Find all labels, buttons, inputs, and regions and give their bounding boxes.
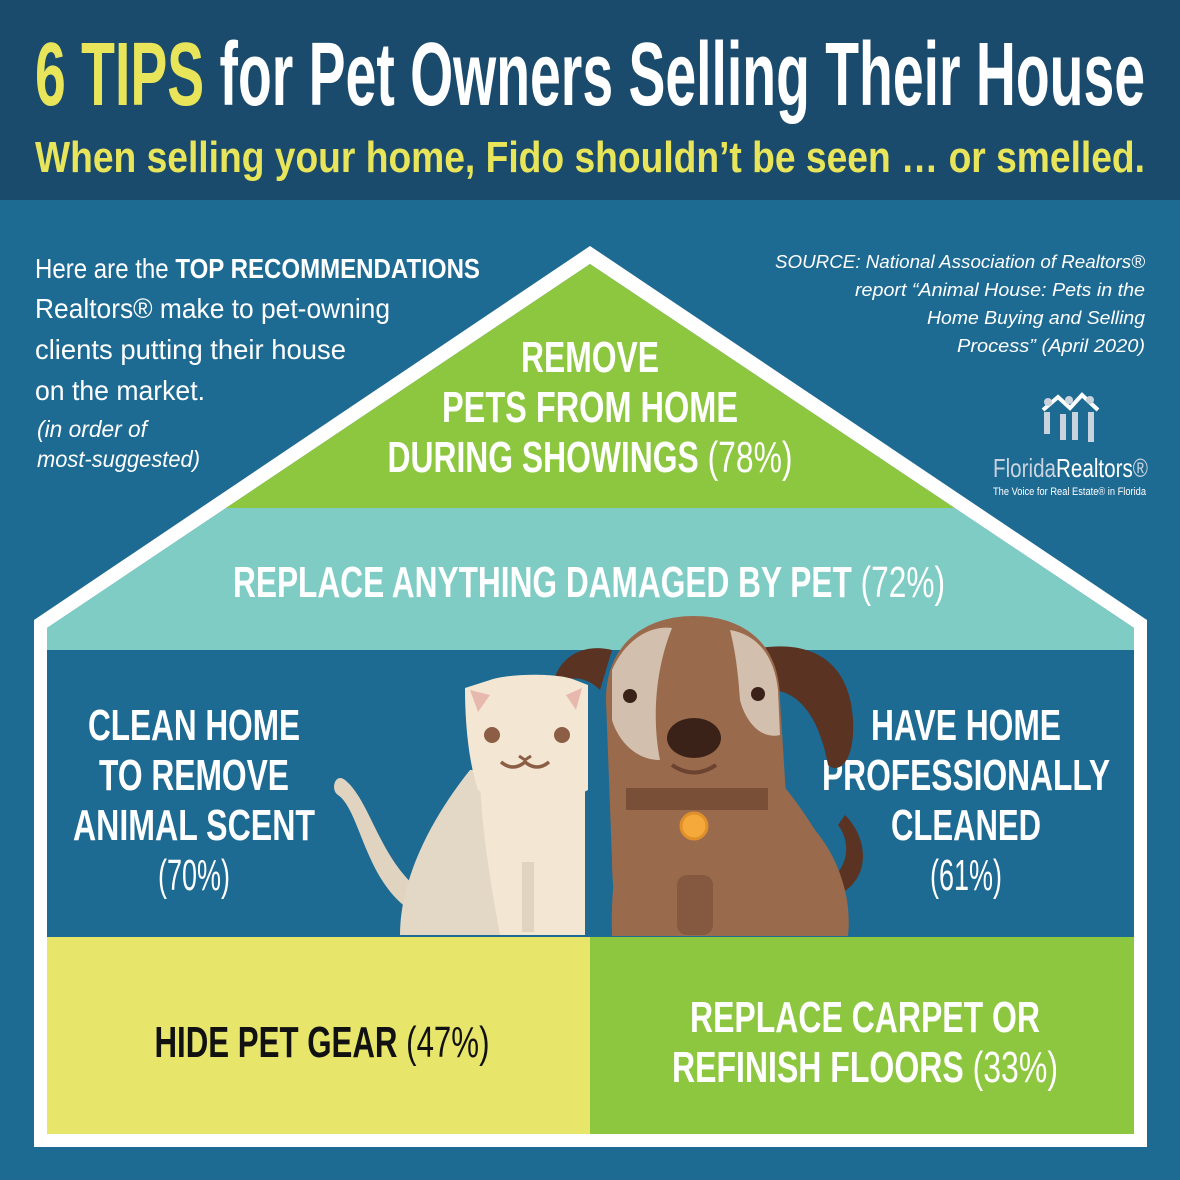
tip 3: clean home: ANIMAL SCENT — [73, 801, 315, 850]
dog ears — [552, 648, 612, 690]
dog — [552, 616, 863, 936]
logo: Florida Realtors: The Voice for Real Estate® in Florida — [993, 486, 1147, 498]
intro text: Here are the TOP RECOMMENDATIONS — [35, 253, 480, 284]
tip 1: remove pets: DURING SHOWINGS (78%) — [388, 433, 792, 482]
tip 3: clean home: TO REMOVE — [99, 751, 289, 800]
tip 6: replace carpet: REFINISH FLOORS (33%) — [672, 1043, 1058, 1092]
tip 4: professionally cleaned: HAVE HOME — [871, 701, 1061, 750]
cat head — [465, 675, 588, 801]
source text: Home Buying and Selling — [927, 308, 1145, 328]
logo: Florida Realtors — [993, 395, 1148, 498]
teal band — [0, 508, 1180, 650]
tip 3: clean home: (70%) — [158, 851, 230, 900]
intro text — [35, 253, 480, 472]
tip 1: remove pets: REMOVE — [521, 333, 659, 382]
icon: people house — [1043, 395, 1098, 442]
dog tail — [830, 815, 863, 895]
intro text: on the market. — [35, 375, 205, 406]
cat tail — [334, 778, 420, 910]
tip 4: professionally cleaned — [822, 701, 1110, 900]
source text: SOURCE: National Association of Realtors® — [775, 252, 1146, 272]
logo: Florida Realtors: FloridaRealtors® — [993, 453, 1148, 483]
source text — [775, 252, 1146, 356]
dog body — [612, 760, 849, 936]
house sections — [47, 264, 1134, 1134]
tip 6: replace carpet: REPLACE CARPET OR — [690, 993, 1040, 1042]
tip 4: professionally cleaned: CLEANED — [891, 801, 1041, 850]
source text: report “Animal House: Pets in the — [855, 280, 1145, 300]
tip 4: professionally cleaned: (61%) — [930, 851, 1002, 900]
dog head — [606, 616, 790, 935]
tip 3: clean home: CLEAN HOME — [88, 701, 300, 750]
tip 1: remove pets: PETS FROM HOME — [442, 383, 738, 432]
cat — [334, 675, 588, 935]
intro text: Realtors® make to pet-owning — [35, 293, 390, 324]
dog eyes, nose, mouth, collar — [623, 689, 637, 703]
intro text: clients putting their house — [35, 334, 346, 365]
intro text: most-suggested) — [37, 446, 200, 472]
house outline — [34, 246, 1147, 1147]
source text: Process” (April 2020) — [957, 336, 1145, 356]
tip 1: remove pets — [388, 333, 792, 482]
tip 5: hide pet gear: HIDE PET GEAR (47%) — [154, 1018, 490, 1067]
tip 2: replace damaged: REPLACE ANYTHING DAMAGED BY PET (72%) — [233, 558, 945, 607]
intro text: (in order of — [37, 416, 150, 442]
header band — [0, 0, 1180, 200]
tip 6: replace carpet — [672, 993, 1058, 1092]
tip 3: clean home — [73, 701, 315, 900]
cat body — [400, 770, 585, 935]
roof panel — [220, 264, 960, 508]
green panel — [590, 937, 1180, 1137]
yellow panel — [0, 937, 590, 1137]
